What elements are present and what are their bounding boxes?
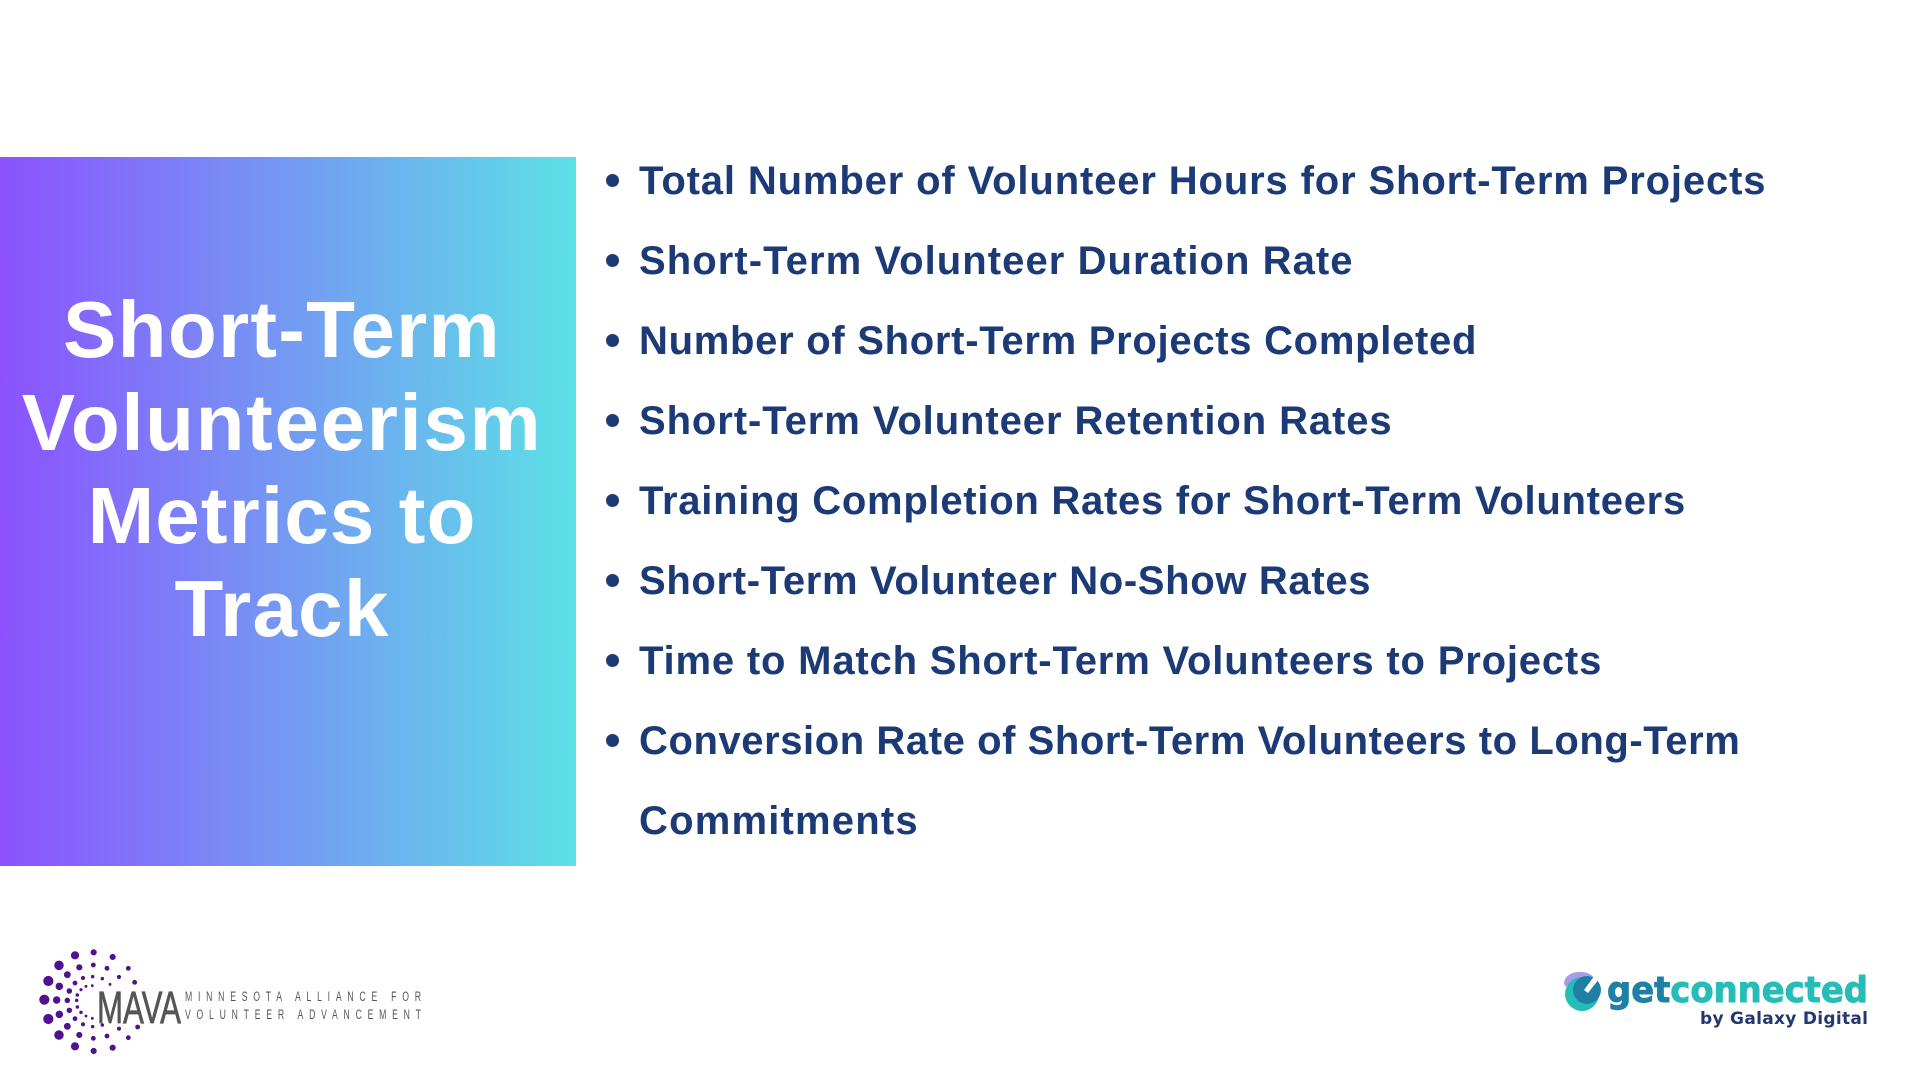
MAVA wordmark: MAVA bbox=[97, 982, 181, 1033]
metric 5: Training Completion Rates for Short-Term Volunteers bbox=[639, 479, 1686, 523]
metrics list bbox=[606, 159, 1766, 843]
metric 3: Number of Short-Term Projects Completed bbox=[639, 319, 1477, 363]
title: Track bbox=[174, 564, 390, 653]
title: Short-Term bbox=[63, 285, 501, 374]
panel: title gradient bbox=[0, 157, 576, 866]
MAVA tagline line 2: VOLUNTEER ADVANCEMENT bbox=[185, 1007, 427, 1023]
metric 4: Short-Term Volunteer Retention Rates bbox=[639, 399, 1393, 443]
icon: getconnected orb bbox=[1564, 972, 1601, 1011]
MAVA tagline line 1: MINNESOTA ALLIANCE FOR bbox=[185, 989, 427, 1005]
tagline by Galaxy Digital: by Galaxy Digital bbox=[1700, 1009, 1868, 1029]
title: Metrics to bbox=[88, 471, 476, 560]
logo: getconnected bbox=[1564, 970, 1868, 1029]
title bbox=[22, 285, 542, 653]
metric 7: Time to Match Short-Term Volunteers to Projects bbox=[639, 639, 1602, 683]
metric 8: Commitments bbox=[639, 799, 919, 843]
metric 8 bbox=[639, 719, 1740, 843]
getconnected wordmark: getconnected bbox=[1607, 970, 1868, 1011]
logo: MAVA bbox=[40, 950, 427, 1054]
icon: MAVA dot burst bbox=[40, 950, 140, 1054]
metric 6: Short-Term Volunteer No-Show Rates bbox=[639, 559, 1371, 603]
metric 1: Total Number of Volunteer Hours for Short-Term Projects bbox=[639, 159, 1766, 203]
metric 8: Conversion Rate of Short-Term Volunteers to Long-Term bbox=[639, 719, 1740, 763]
title: Volunteerism bbox=[22, 378, 542, 467]
metric 2: Short-Term Volunteer Duration Rate bbox=[639, 239, 1354, 283]
